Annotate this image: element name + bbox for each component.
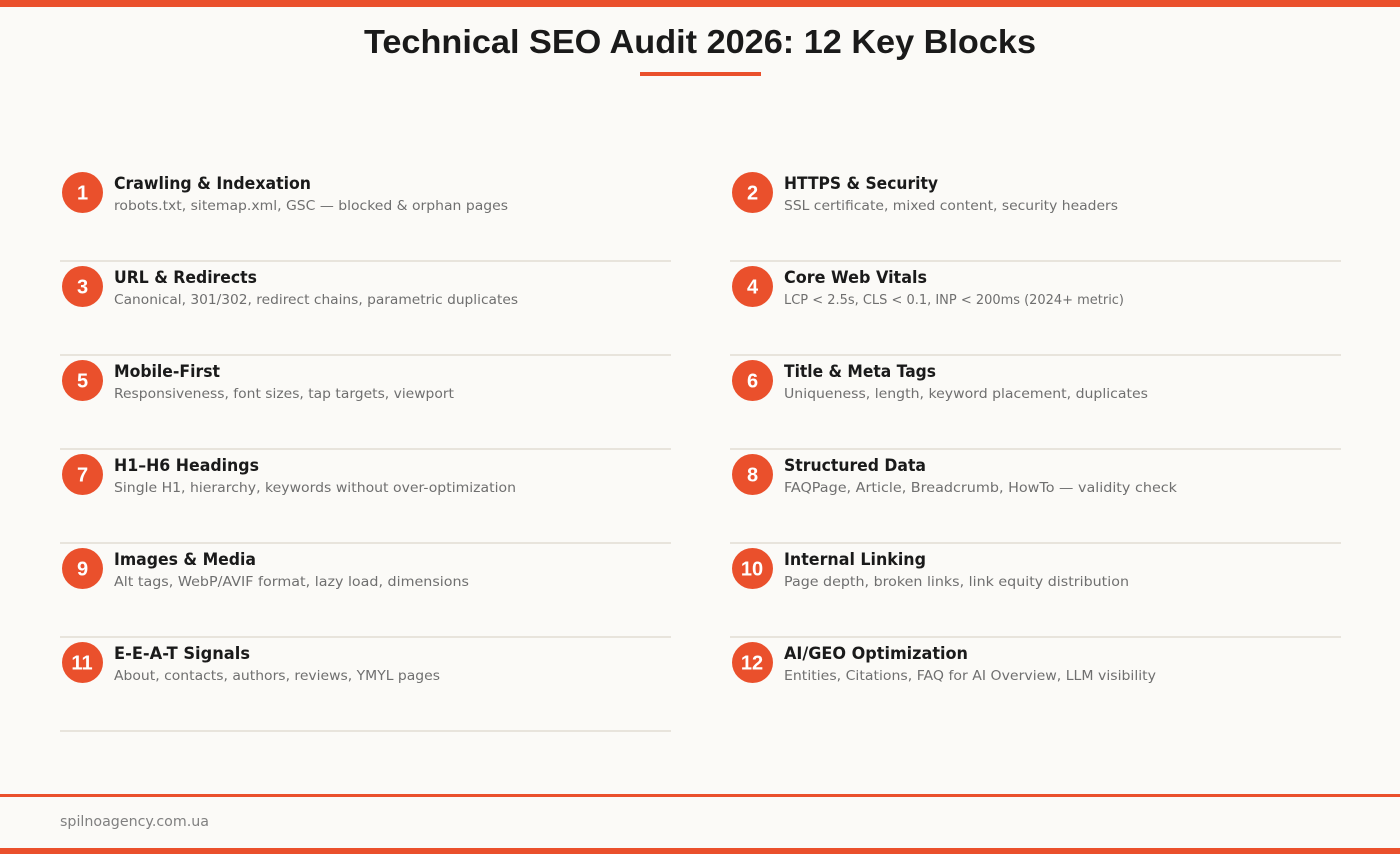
item 10: Internal Linking: [732, 548, 1129, 590]
item 5: Mobile-First: [62, 360, 454, 402]
item 12: AI/GEO Optimization: [732, 642, 1156, 684]
footer text: spilnoagency.com.ua: [60, 814, 209, 830]
item 9: Images & Media: Images & Media: [114, 550, 256, 570]
item 1: Crawling & Indexation: [62, 172, 508, 214]
item 3: URL & Redirects: Canonical, 301/302, redirect chains, parametric duplicates: [114, 292, 518, 308]
item 10: Internal Linking: Internal Linking: [784, 550, 926, 570]
item 12: AI/GEO Optimization: 12: [741, 652, 763, 674]
footer rule: [0, 794, 1400, 797]
item 6: Title & Meta Tags: 6: [747, 370, 758, 392]
item 12: AI/GEO Optimization: AI/GEO Optimization: [784, 644, 968, 664]
item 6: Title & Meta Tags: [732, 360, 1148, 402]
item 11: E-E-A-T Signals: [62, 642, 440, 684]
item 5: Mobile-First: Responsiveness, font sizes, tap targets, viewport: [114, 386, 454, 402]
item 11: E-E-A-T Signals: About, contacts, authors, reviews, YMYL pages: [114, 668, 440, 684]
item 10: Internal Linking: Page depth, broken links, link equity distribution: [784, 574, 1129, 590]
title: Technical SEO Audit 2026: 12 Key Blocks: [364, 23, 1036, 60]
item 11: E-E-A-T Signals: E-E-A-T Signals: [114, 644, 250, 664]
item 4: Core Web Vitals: LCP < 2.5s, CLS < 0.1, INP < 200ms (2024+ metric): [784, 292, 1124, 308]
item 1: Crawling & Indexation: robots.txt, sitemap.xml, GSC — blocked & orphan pages: [114, 198, 508, 214]
item 9: Images & Media: [62, 548, 469, 590]
item 2: HTTPS & Security: HTTPS & Security: [784, 174, 938, 194]
bottom accent bar: [0, 848, 1400, 854]
item 8: Structured Data: 8: [747, 464, 758, 486]
item 3: URL & Redirects: [62, 266, 518, 308]
item 2: HTTPS & Security: [732, 172, 1118, 214]
item 8: Structured Data: [732, 454, 1177, 496]
item 7: H1–H6 Headings: Single H1, hierarchy, keywords without over-optimization: [114, 480, 516, 496]
item 4: Core Web Vitals: 4: [747, 276, 759, 298]
item 12: AI/GEO Optimization: Entities, Citations, FAQ for AI Overview, LLM visibility: [784, 668, 1156, 684]
item 11: E-E-A-T Signals: 11: [71, 652, 93, 674]
item 6: Title & Meta Tags: Title & Meta Tags: [784, 362, 936, 382]
item 6: Title & Meta Tags: Uniqueness, length, keyword placement, duplicates: [784, 386, 1148, 402]
item 3: URL & Redirects: URL & Redirects: [114, 268, 257, 288]
item 10: Internal Linking: 10: [741, 558, 763, 580]
item 3: URL & Redirects: 3: [77, 276, 88, 298]
item 4: Core Web Vitals: Core Web Vitals: [784, 268, 927, 288]
item 9: Images & Media: Alt tags, WebP/AVIF format, lazy load, dimensions: [114, 574, 469, 590]
item 5: Mobile-First: 5: [77, 370, 88, 392]
item 8: Structured Data: FAQPage, Article, Breadcrumb, HowTo — validity check: [784, 480, 1177, 496]
item 7: H1–H6 Headings: [62, 454, 516, 496]
item 1: Crawling & Indexation: Crawling & Indexation: [114, 174, 311, 194]
item 7: H1–H6 Headings: H1–H6 Headings: [114, 456, 259, 476]
item 4: Core Web Vitals: [732, 266, 1124, 308]
item 1: Crawling & Indexation: 1: [77, 182, 88, 204]
item 2: HTTPS & Security: 2: [747, 182, 758, 204]
item 2: HTTPS & Security: SSL certificate, mixed content, security headers: [784, 198, 1118, 214]
top accent bar: [0, 0, 1400, 7]
item 7: H1–H6 Headings: 7: [77, 464, 88, 486]
item 5: Mobile-First: Mobile-First: [114, 362, 220, 382]
title underline: [640, 72, 761, 76]
item 9: Images & Media: 9: [77, 558, 88, 580]
item 8: Structured Data: Structured Data: [784, 456, 926, 476]
